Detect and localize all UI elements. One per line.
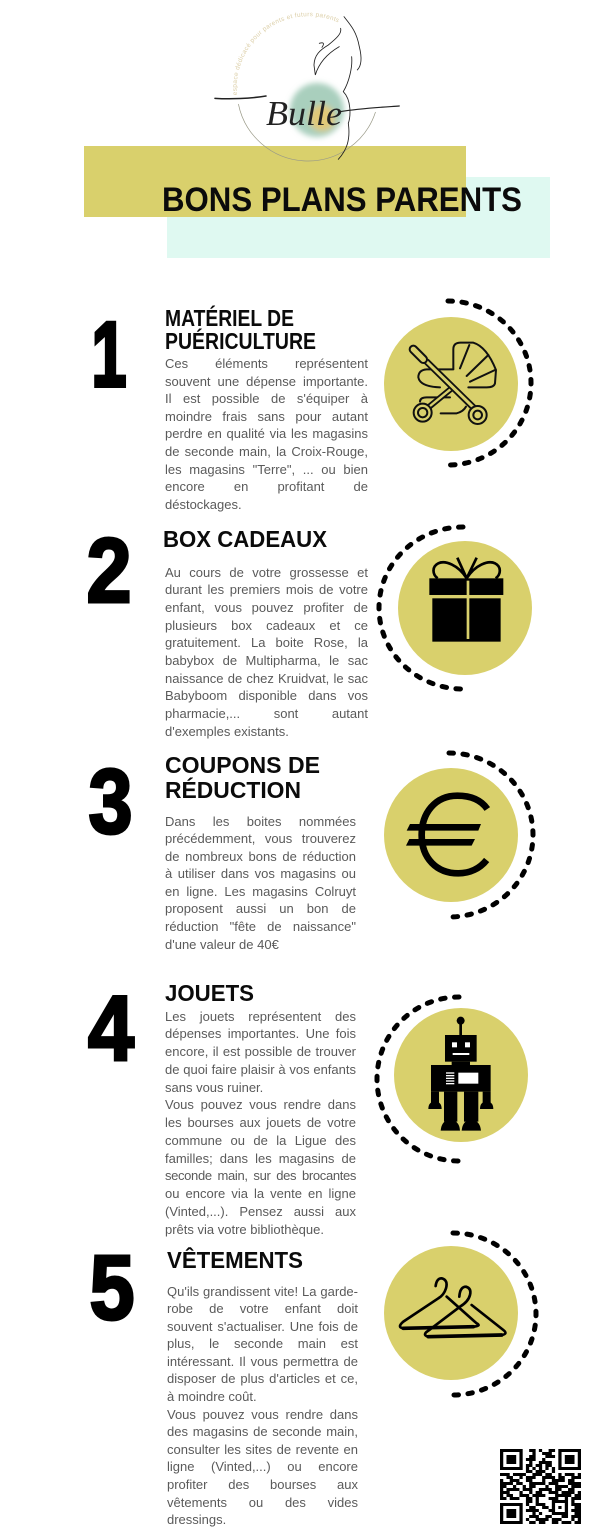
- body text: plusieurs box cadeaux et ce: [165, 618, 368, 633]
- olive title band: [84, 146, 466, 217]
- body text: à utiliser dans vos magasins ou: [165, 866, 356, 881]
- logo silhouette: [215, 17, 399, 159]
- body text: de nombreux bons de réduction: [165, 849, 356, 864]
- body text: ou encore via la vente en ligne: [165, 1186, 356, 1201]
- body text: seconde main, sur des brocantes: [165, 1168, 356, 1183]
- body text: encore, il est possible de trouver: [165, 1044, 356, 1059]
- body text: pharmacie,... sont autant: [165, 706, 368, 721]
- body text: Il est possible de s'équiper à: [165, 391, 368, 406]
- icon: euro: [384, 753, 533, 917]
- body text: robe de votre enfant doit: [167, 1301, 358, 1316]
- body text: profiter des bourses aux: [167, 1477, 358, 1492]
- body text: encore en profitant de: [165, 479, 368, 494]
- body text: perdre en qualité via les magasins: [165, 426, 368, 441]
- body text: déstockages.: [165, 497, 242, 512]
- heading: COUPONS DE: [165, 752, 320, 778]
- panel: 3 coupons de réduction: [88, 750, 536, 952]
- body text: de quoi faire plaisir à vos enfants: [165, 1062, 356, 1077]
- body text: moindre frais sans pour autant: [165, 409, 368, 424]
- number 1: 1: [92, 303, 126, 406]
- body text: [165, 564, 368, 739]
- heading: JOUETS: [165, 980, 254, 1006]
- logo: Bulle: [214, 12, 400, 162]
- heading: [165, 752, 320, 803]
- body text: [165, 814, 356, 952]
- title: BONS PLANS PARENTS: [162, 181, 522, 219]
- heading: MATÉRIEL DE: [165, 304, 294, 331]
- body text: Qu'ils grandissent vite! La garde-: [167, 1284, 358, 1298]
- panel: 5 vêtements: [89, 1230, 538, 1527]
- body text: plus, le seconde main est: [167, 1336, 358, 1351]
- panel: 4 jouets: [88, 977, 528, 1236]
- body text: en ligne. Les magasins Colruyt: [165, 884, 356, 899]
- body text: vêtements ou des vides: [167, 1495, 358, 1510]
- body text: Dans les boites nommées: [165, 814, 356, 828]
- heading: VÊTEMENTS: [167, 1246, 303, 1273]
- logo circular tagline: espace dédicacé pour parents et futurs parents: [233, 12, 339, 95]
- body text: naissance de chez Kruidvat, le sac: [165, 671, 368, 686]
- body text: Vous pouvez vous rendre dans: [167, 1407, 358, 1422]
- body text: de seconde main, la Croix-Rouge,: [165, 444, 368, 459]
- body text: babybox de Multipharma, le sac: [165, 653, 368, 668]
- body text: dressings.: [167, 1512, 226, 1527]
- body text: gratuitement. La boite Rose, la: [165, 635, 368, 650]
- body text: [167, 1284, 358, 1527]
- body text: les magasins "Terre", ... ou bien: [165, 462, 368, 477]
- icon: robot: [377, 997, 528, 1161]
- logo watercolor blob: [290, 83, 344, 137]
- header: logo and title: [84, 12, 550, 258]
- body text: Vous pouvez vous rendre dans: [165, 1097, 356, 1112]
- body text: d'une valeur de 40€: [165, 937, 279, 952]
- logo wordmark: Bulle: [266, 94, 342, 133]
- body text: familles; dans les magasins de: [165, 1150, 356, 1166]
- QR code: [500, 1449, 581, 1524]
- body text: disposer de plus d'articles et ce,: [167, 1371, 358, 1386]
- body text: Les jouets représentent des: [165, 1008, 356, 1024]
- body text: souvent une dépense importante.: [165, 374, 368, 389]
- panel: 2 box cadeaux: [86, 520, 532, 739]
- heading: [165, 304, 316, 354]
- number 5: 5: [89, 1237, 135, 1339]
- heading: BOX CADEAUX: [163, 526, 328, 552]
- number 2: 2: [86, 520, 132, 622]
- body text: souvent s'actualiser. Une fois de: [167, 1319, 358, 1334]
- body text: ligne (Vinted,...) ou encore: [167, 1459, 358, 1474]
- number 4: 4: [88, 977, 134, 1080]
- body text: [165, 1008, 356, 1236]
- body text: sans vous ruiner.: [165, 1080, 263, 1094]
- body text: enfant, vous pouvez profiter de: [165, 600, 368, 615]
- mint title band: [167, 177, 550, 258]
- body text: Babyboom disponible dans vos: [165, 688, 368, 703]
- body text: à moindre coût.: [167, 1389, 257, 1404]
- body text: les bourses aux jouets de votre: [165, 1115, 356, 1130]
- body text: intéressant. Il vous permettra de: [167, 1354, 358, 1369]
- body text: prêts via votre bibliothèque.: [165, 1222, 324, 1236]
- body text: commune ou de la Ligue des: [165, 1133, 356, 1148]
- body text: Ces éléments représentent: [165, 356, 368, 371]
- icon: gift: [379, 527, 532, 689]
- body text: d'exemples existants.: [165, 724, 289, 739]
- icon: hangers: [384, 1233, 536, 1395]
- body text: Au cours de votre grossesse et: [165, 564, 368, 580]
- heading: PUÉRICULTURE: [165, 327, 316, 354]
- panel: 1 matériel de puériculture: [92, 298, 534, 512]
- body text: [165, 356, 368, 512]
- heading: RÉDUCTION: [165, 776, 301, 803]
- body text: précédemment, vous trouverez: [165, 831, 356, 846]
- body text: des magasins de seconde main,: [167, 1424, 358, 1439]
- body text: (Vinted,...). Pensez aussi aux: [165, 1204, 356, 1219]
- body text: proposent aussi un bon de: [165, 901, 356, 916]
- body text: réduction "fête de naissance": [165, 919, 356, 934]
- body text: durant les premiers mois de votre: [165, 582, 368, 597]
- body text: dépenses importantes. Une fois: [165, 1026, 356, 1041]
- logo circle: [238, 104, 376, 161]
- number 3: 3: [88, 750, 133, 853]
- body text: consulter les sites de revente en: [167, 1442, 358, 1457]
- icon: stroller: [384, 301, 531, 465]
